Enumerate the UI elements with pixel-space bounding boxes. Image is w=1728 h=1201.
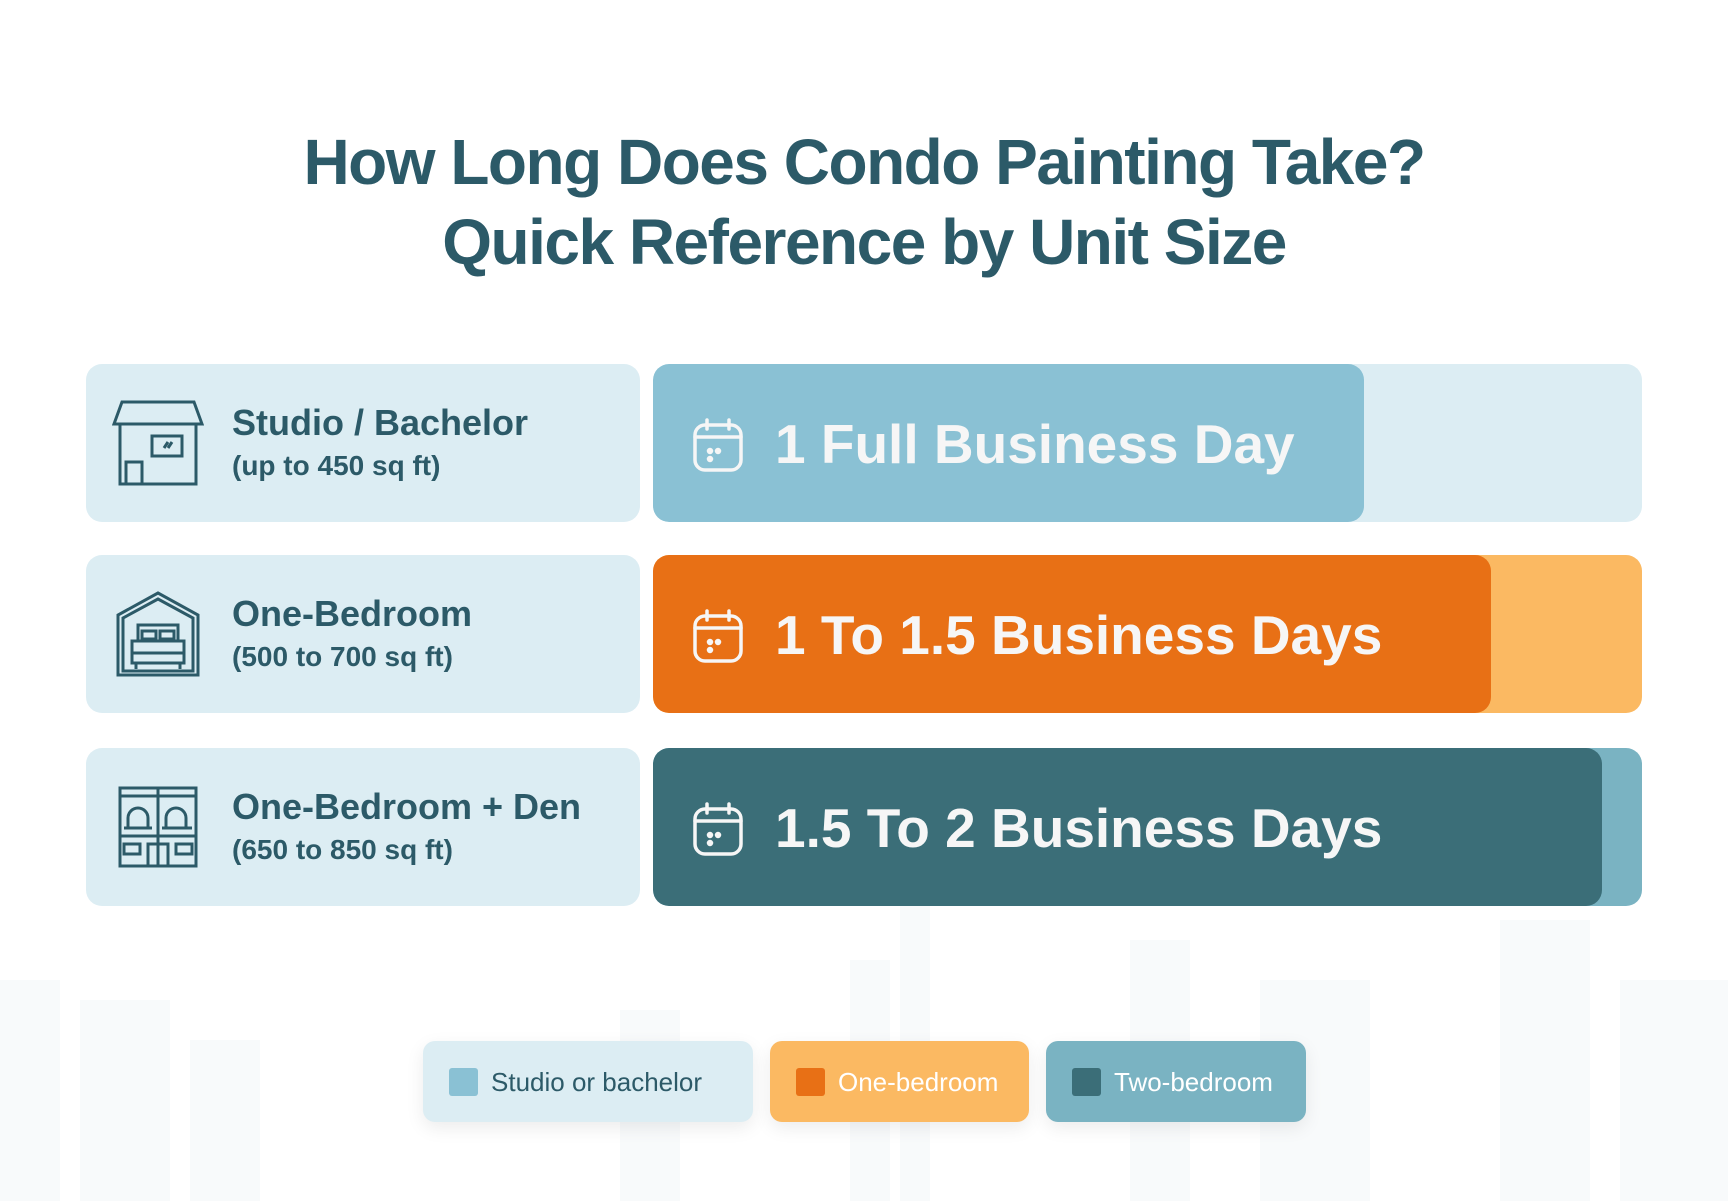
bar: 1.5 to 2 business days: 1.5 To 2 Business Days xyxy=(775,797,1382,859)
panel: one-bedroom + den label: (650 to 850 sq ft) xyxy=(232,834,453,865)
panel: one-bedroom + den label xyxy=(86,748,640,906)
bar: 1 to 1.5 business days: 1 To 1.5 Business Days xyxy=(775,604,1382,666)
panel: studio label xyxy=(86,364,640,522)
panel: one-bedroom + den label: One-Bedroom + Den xyxy=(232,786,581,827)
title: How Long Does Condo Painting Take? xyxy=(303,126,1425,198)
panel: studio label: Studio / Bachelor xyxy=(232,402,528,443)
legend: one-bedroom xyxy=(770,1041,1029,1122)
bar: 1.5 to 2 business days xyxy=(653,748,1642,906)
legend: two-bedroom xyxy=(1046,1041,1306,1122)
panel: one-bedroom label xyxy=(86,555,640,713)
icon: calendar xyxy=(693,609,743,663)
legend: two-bedroom: Two-bedroom xyxy=(1114,1067,1273,1097)
title xyxy=(303,126,1425,278)
title: Quick Reference by Unit Size xyxy=(442,206,1286,278)
icon: bedroom house xyxy=(116,591,200,676)
panel: one-bedroom label: (500 to 700 sq ft) xyxy=(232,641,453,672)
panel: one-bedroom label: One-Bedroom xyxy=(232,593,472,634)
bar: 1 to 1.5 business days xyxy=(653,555,1642,713)
icon: calendar xyxy=(693,418,743,472)
legend: one-bedroom: One-bedroom xyxy=(838,1067,998,1097)
legend: studio or bachelor: Studio or bachelor xyxy=(491,1067,702,1097)
background skyline xyxy=(0,880,1728,1201)
legend: studio or bachelor xyxy=(423,1041,753,1122)
bar: 1 full business day: 1 Full Business Day xyxy=(775,413,1295,475)
bar: 1 full business day xyxy=(653,364,1642,522)
icon: studio house xyxy=(112,400,204,486)
icon: townhouse xyxy=(118,786,198,868)
panel: studio label: (up to 450 sq ft) xyxy=(232,450,440,481)
icon: calendar xyxy=(693,802,743,856)
